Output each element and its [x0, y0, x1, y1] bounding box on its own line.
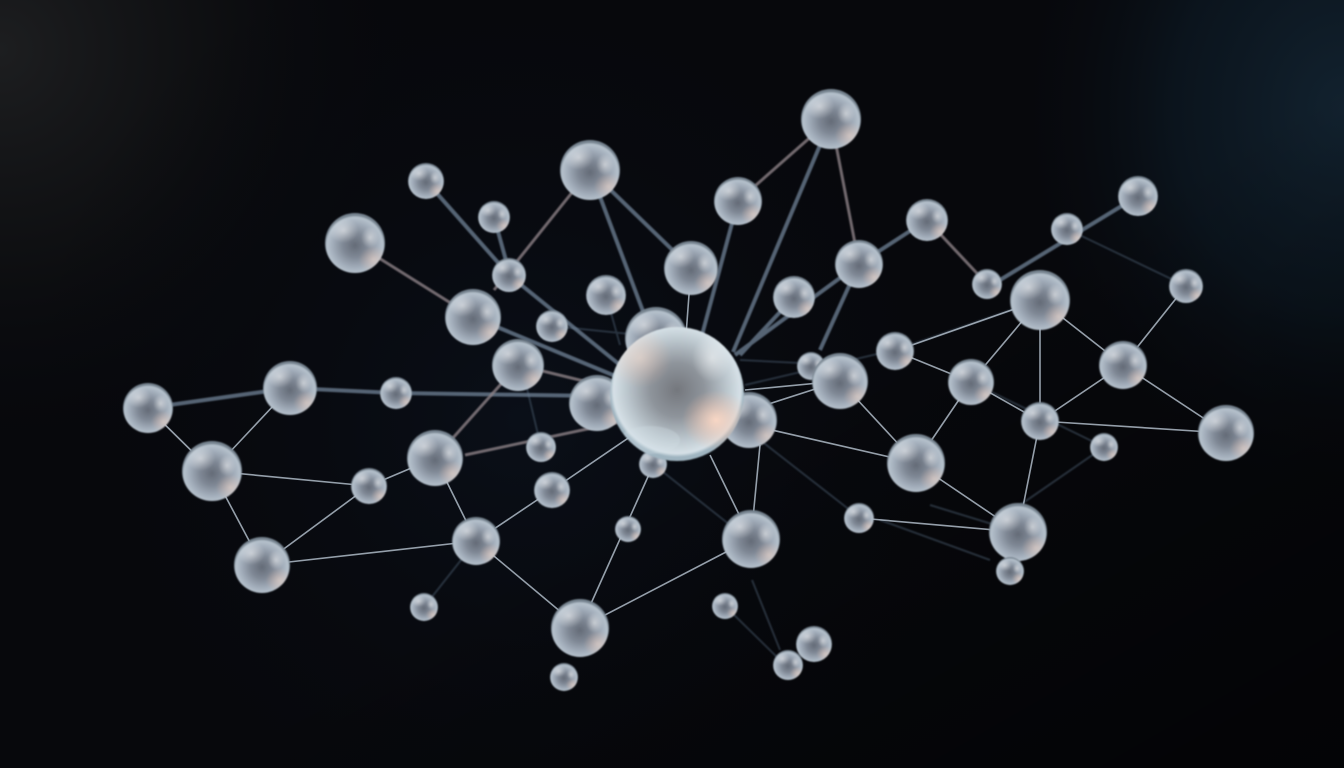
- spheres: right cluster: [812, 176, 1257, 585]
- node: back sphere left of hub: [569, 375, 628, 431]
- pink-tinted links: [355, 119, 987, 458]
- spheres: left cluster: [123, 361, 466, 593]
- node: back sphere upper centre: [625, 307, 691, 369]
- thick blue links: [148, 119, 1138, 408]
- node: back sphere right of hub: [721, 392, 780, 448]
- spheres: lower cluster: [410, 432, 834, 691]
- central hub sphere: [608, 327, 750, 461]
- thin bright links: [148, 268, 1226, 628]
- spheres: upper cluster: [325, 89, 886, 391]
- node: small sphere below hub: [639, 450, 669, 478]
- faint background links: [424, 229, 1186, 660]
- node: small back sphere: [797, 352, 827, 380]
